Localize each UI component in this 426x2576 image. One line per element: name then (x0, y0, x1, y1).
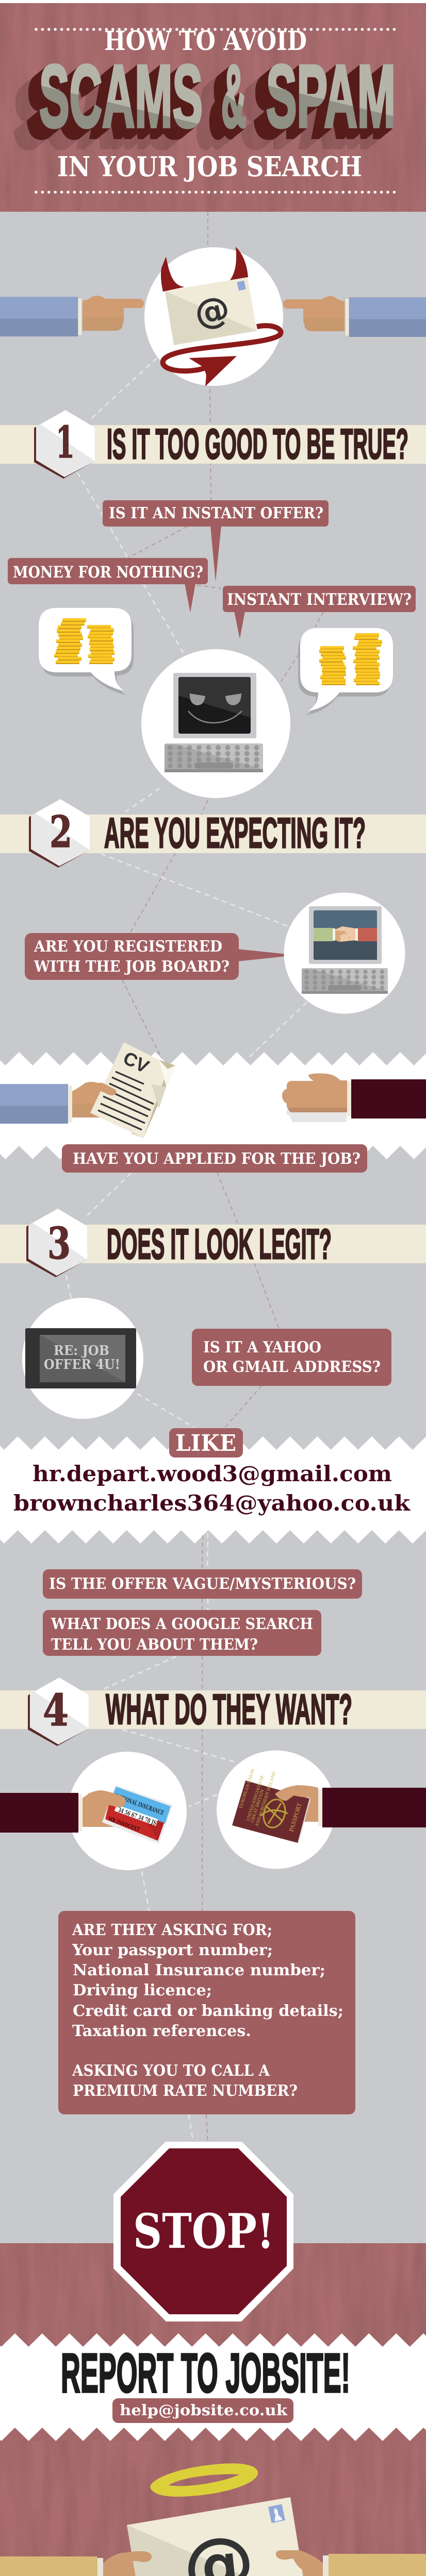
icon: left speech bubble with coins (39, 608, 134, 695)
icon: hexagon badge 4: 4 (43, 1685, 69, 1736)
callout: google search: WHAT DOES A GOOGLE SEARCH (51, 1615, 313, 1633)
icon: evil computer (141, 649, 290, 798)
icon: stop sign: STOP! (133, 2203, 274, 2259)
callout: registered with job board (25, 933, 296, 980)
icon: devil envelope: @ (191, 288, 234, 335)
icon: tablet with job offer (22, 1298, 143, 1419)
dotted rules in banner (36, 29, 398, 192)
passport: GREAT BRITAIN (249, 1788, 265, 1823)
icon: open fist taking CV (282, 1073, 426, 1122)
callout: help email (112, 2398, 293, 2423)
callout: yahoo or gmail: IS IT A YAHOO (203, 1338, 321, 1357)
callout: registered with job board: ARE YOU REGISTERED (34, 938, 222, 956)
callout: google search (43, 1610, 321, 1656)
icon: computer with handshake (284, 892, 405, 1014)
icon: left pointing hand (0, 296, 144, 336)
panel: what are they asking for: ASKING YOU TO CALL A (72, 2062, 270, 2080)
panel: what are they asking for: Taxation references. (72, 2022, 251, 2040)
panel: section 1 heading band (0, 410, 426, 479)
passport: UNITED KINGDOM OF (245, 1774, 265, 1822)
icon: angel envelope held by two hands (0, 2497, 426, 2576)
icon: hexagon badge 2 (29, 799, 90, 868)
icon: right pointing hand (283, 296, 426, 337)
CV paper (90, 1042, 175, 1138)
title: scams and spam: SCAMS (39, 47, 203, 146)
panel: red footer background (0, 2243, 426, 2576)
circle behind devil email (144, 247, 283, 386)
icon: stop sign (113, 2142, 293, 2321)
thumb (88, 1790, 126, 1807)
callout: yahoo or gmail (192, 1329, 391, 1386)
panel: what are they asking for: National Insurance number; (73, 1961, 325, 1979)
callout: have you applied (62, 1144, 367, 1173)
icon: hand with passport (217, 1751, 426, 1869)
callout: instant interview (223, 586, 416, 639)
callout: registered with job board: WITH THE JOB BOARD? (34, 958, 230, 976)
callout: yahoo or gmail: OR GMAIL ADDRESS? (203, 1358, 381, 1376)
passport: AND NORTHERN IRELAND (254, 1771, 277, 1827)
passport (232, 1768, 310, 1843)
thumb (93, 1083, 117, 1095)
panel: what are they asking for: PREMIUM RATE NUMBER? (73, 2082, 298, 2100)
callout: instant offer (103, 500, 329, 582)
icon: halo (150, 2463, 258, 2497)
callout: instant offer: IS IT AN INSTANT OFFER? (109, 504, 323, 522)
white band: email examples (0, 1436, 426, 1544)
card (102, 1785, 173, 1844)
panel: what are they asking for (58, 1911, 355, 2114)
panel: what are they asking for: ARE THEY ASKING FOR; (72, 1921, 272, 1939)
icon: hand giving CV (0, 1042, 175, 1138)
keyboard (165, 743, 263, 772)
icon: hexagon badge 3 (26, 1209, 87, 1277)
thumb (275, 1785, 309, 1801)
CV paper: CV (120, 1047, 152, 1077)
icon: hexagon badge 1 (34, 410, 95, 479)
icon: tablet with job offer: RE: JOB (54, 1343, 109, 1359)
icon: devil envelope (161, 247, 281, 386)
card: NATIONAL INSURANCE (114, 1792, 165, 1817)
title line: how to avoid: HOW TO AVOID (104, 26, 307, 57)
icon: hexagon badge 1: 1 (56, 417, 75, 468)
card: MR INNOCENT (107, 1816, 141, 1833)
panel: what are they asking for: Your passport number; (72, 1941, 273, 1959)
icon: hand with national insurance card (0, 1752, 187, 1870)
title: scams and spam: & (221, 47, 247, 146)
callout: help email: help@jobsite.co.uk (120, 2401, 288, 2419)
passport: EUROPEAN UNION (238, 1768, 256, 1809)
passport: PASSPORT (287, 1802, 303, 1833)
dashed connector lines (66, 212, 323, 2143)
title line: in your job search: IN YOUR JOB SEARCH (57, 151, 362, 183)
white band: CV section (0, 1052, 426, 1159)
callout: have you applied: HAVE YOU APPLIED FOR THE JOB? (73, 1150, 361, 1168)
callout: google search: TELL YOU ABOUT THEM? (51, 1636, 258, 1654)
callout: vague offer: IS THE OFFER VAGUE/MYSTERIOUS? (49, 1575, 356, 1593)
text: example email addresses: hr.depart.wood3@gmail.com (32, 1461, 392, 1486)
panel: title banner (0, 3, 426, 212)
card: 34 56 67 34 78 JS (117, 1806, 157, 1826)
panel: what are they asking for: Credit card or banking details; (73, 2002, 343, 2020)
icon: tablet with job offer: OFFER 4U! (44, 1357, 120, 1372)
callout: like: LIKE (175, 1430, 236, 1456)
icon: hexagon badge 4 (28, 1677, 89, 1746)
text: example email addresses (13, 1461, 411, 1516)
panel: what are they asking for: Driving licence; (73, 1981, 212, 1999)
keyboard (302, 968, 388, 994)
text: example email addresses: browncharles364@yahoo.co.uk (13, 1490, 411, 1516)
callout: money for nothing (8, 558, 208, 613)
panel: section 4 heading band (0, 1677, 426, 1746)
callout: vague offer (43, 1569, 362, 1599)
page background: grey (0, 212, 426, 2243)
icon: right speech bubble with coins (298, 628, 393, 715)
icon: hexagon badge 3: 3 (47, 1218, 71, 1269)
callout: money for nothing: MONEY FOR NOTHING? (13, 563, 203, 582)
panel: section 3 heading band (0, 1209, 426, 1277)
panel: section 2 heading band (0, 799, 426, 868)
icon: hexagon badge 2: 2 (50, 806, 72, 857)
